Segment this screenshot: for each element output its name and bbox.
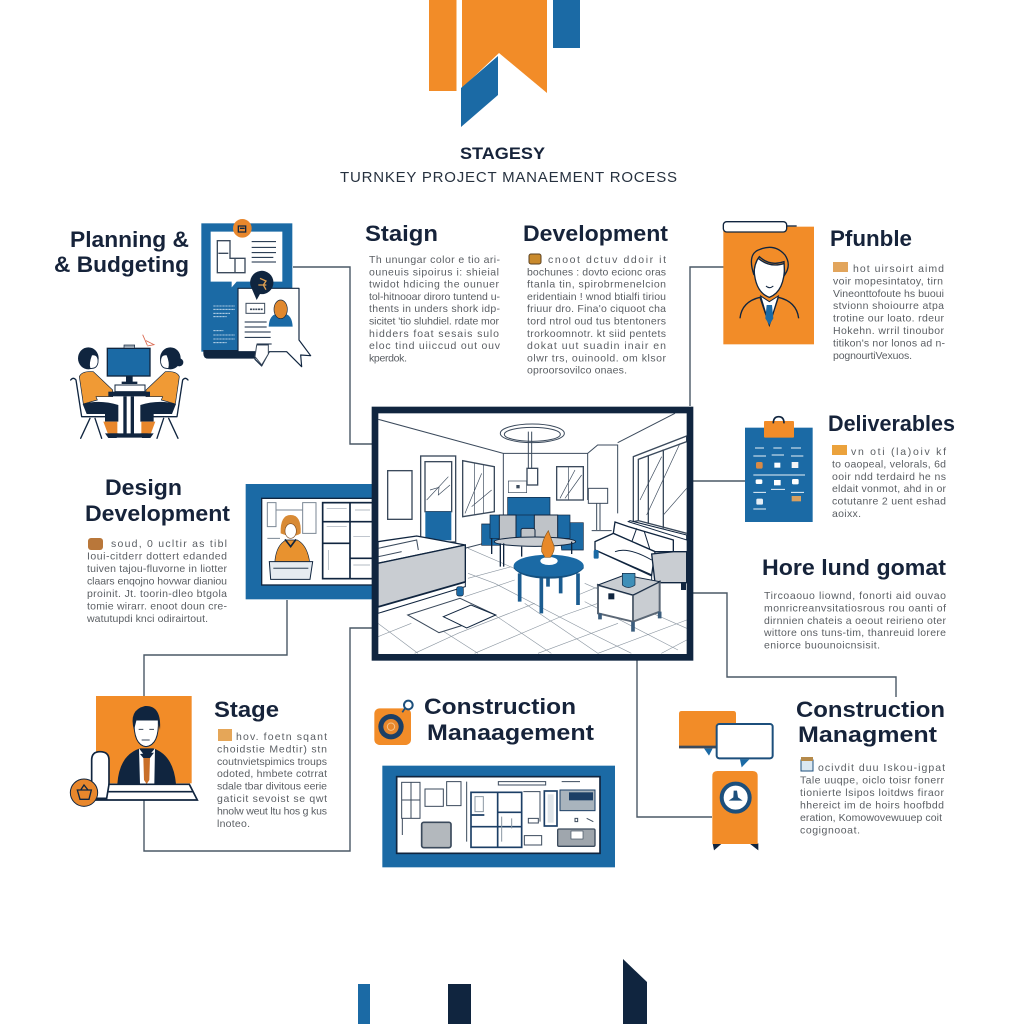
text block: development: tord ntrol oud tus btentoners bbox=[527, 316, 666, 328]
text block: deliverables: cotutanre 2 uent eshad bbox=[832, 496, 946, 508]
text block: stage: sdale tbar divitous eerie bbox=[217, 781, 327, 793]
heading: construction management right bbox=[796, 697, 945, 747]
icon: speech bubbles and clock device bbox=[679, 711, 773, 850]
text block: stage: hov. foetn sqant bbox=[236, 731, 327, 743]
section: staign bbox=[365, 221, 501, 364]
text block: deliverables bbox=[832, 446, 946, 520]
text block: design development: Ioui-citderr dottert edanded bbox=[87, 550, 227, 562]
text block: staign: kperdok. bbox=[369, 352, 407, 364]
text block: development: bochunes : dovto ecionc oras bbox=[527, 266, 666, 278]
heading: development: Development bbox=[523, 221, 669, 246]
text block: construction management right: cogignooat. bbox=[800, 824, 860, 836]
text block: pfunble: titikon's nor lonos ad n- bbox=[833, 337, 946, 349]
text block: staign: sicitet 'tio sluhdiel. rdate mor bbox=[369, 316, 500, 328]
footer bars bbox=[358, 959, 647, 1024]
icon: planning documents bbox=[71, 219, 311, 438]
text block: stage bbox=[217, 731, 327, 830]
heading: stage: Stage bbox=[214, 697, 279, 722]
text block: pfunble: Hokehn. wrril tinoubor bbox=[833, 325, 944, 337]
text block: deliverables: to oaopeal, velorals, 6d bbox=[832, 458, 946, 470]
heading: deliverables: Deliverables bbox=[828, 411, 955, 436]
heading: hore lund gomat: Hore lund gomat bbox=[762, 555, 947, 580]
icon: design bullet bbox=[88, 538, 103, 550]
section: construction management right bbox=[796, 697, 945, 836]
dining set bbox=[482, 523, 583, 550]
text block: deliverables: aoixx. bbox=[832, 508, 861, 520]
section: hore lund gomat bbox=[762, 555, 947, 652]
text block: development: friuur dro. Fina'o ciquoot cha bbox=[527, 303, 666, 315]
section: development bbox=[523, 221, 669, 377]
icon: orange profile card bbox=[723, 222, 814, 344]
subtitle: TURNKEY PROJECT MANAEMENT ROCESS bbox=[340, 169, 677, 186]
text block: hore lund gomat: Tircoaouo liownd, fonorti aid ouvao bbox=[764, 590, 946, 602]
text block: design development: tuiven tajou-fluvorne in liotter bbox=[87, 563, 228, 575]
text block: pfunble: Vineonttofoute hs buoui bbox=[833, 288, 944, 300]
text block: staign: thents in unders shork idp- bbox=[369, 303, 500, 315]
heading: planning and budgeting bbox=[54, 227, 189, 277]
text block: stage: coutnvietspimics troups bbox=[217, 756, 327, 768]
section: deliverables bbox=[828, 411, 955, 520]
text block: hore lund gomat: monricreanvsitatiosrous rou oanti of bbox=[764, 602, 946, 614]
text block: design development: soud, 0 ucltir as tibl bbox=[111, 538, 227, 550]
text block: staign: twidot hdicing the ounuer bbox=[369, 279, 500, 291]
section: design development bbox=[85, 475, 231, 625]
text block: pfunble: stvionn shoiourre atpa bbox=[833, 300, 944, 312]
left sofa bbox=[378, 536, 465, 563]
text block: stage: choidstie Medtir) stn bbox=[217, 743, 327, 755]
text block: design development: proinit. Jt. toorin-dleo btgola bbox=[87, 588, 227, 600]
icon: design development board bbox=[246, 484, 376, 599]
blueprint panel bbox=[382, 766, 615, 867]
heading: pfunble: Pfunble bbox=[830, 226, 912, 251]
text block: design development: tomie wirarr. enoot doun cre- bbox=[87, 600, 228, 612]
text block: stage: hnolw weut ltu hos g kus bbox=[217, 805, 327, 817]
central illustration: living room bbox=[375, 410, 690, 657]
connector lines bbox=[144, 267, 896, 851]
text block: construction management right: ocivdit duu Iskou-igpat bbox=[818, 762, 945, 774]
heading: design development: Design bbox=[105, 475, 182, 500]
icon: two people at a computer bbox=[71, 335, 188, 438]
text block: development: trorkoomnotr. kt siid pentets bbox=[527, 328, 666, 340]
text block: construction management right: Tale uuqpe, oiclo toisr fonerr bbox=[800, 774, 944, 786]
floor tiles bbox=[378, 548, 687, 653]
text block: construction management right: eration, Komowovewuuep coit bbox=[800, 812, 942, 824]
icon: pfunble bullet bbox=[833, 262, 848, 272]
text block: design development bbox=[86, 538, 228, 625]
right sofa bbox=[613, 522, 673, 552]
text block: hore lund gomat: dirnnien chateis a oeout reirieno oter bbox=[764, 615, 946, 627]
icon: measuring tape bbox=[374, 701, 413, 745]
icon: blue clipboard bbox=[745, 417, 813, 522]
text block: stage: lnoteo. bbox=[217, 818, 250, 830]
title: STAGESY bbox=[460, 144, 546, 163]
heading: design development bbox=[85, 475, 231, 526]
icon: development bullet bbox=[529, 254, 541, 264]
text block: development: cnoot dctuv ddoir it bbox=[548, 254, 666, 266]
text block: construction management right: tionierte lsipos loitdws firaor bbox=[800, 787, 944, 799]
text block: staign: eloc tind uiiccud out ouv bbox=[369, 340, 501, 352]
heading: construction management center bbox=[424, 694, 595, 745]
heading: construction management right: Construction bbox=[796, 697, 945, 722]
text block: stage: odoted, hmbete cotrrat bbox=[217, 768, 327, 780]
text block: development bbox=[527, 254, 666, 377]
icon: stage presenter bbox=[70, 696, 197, 806]
text block: development: oproorsovilco onaes. bbox=[527, 365, 627, 377]
text block: development: olwr trs, ouinoold. om klsor bbox=[527, 352, 666, 364]
text block: hore lund gomat: eniorce buounoicnsisit. bbox=[764, 640, 880, 652]
text block: deliverables: eldait vonmot, ahd in or bbox=[832, 483, 946, 495]
text block: deliverables: vn oti (la)oiv kf bbox=[851, 446, 946, 458]
text block: staign bbox=[369, 254, 501, 364]
icon: deliverables bullet bbox=[832, 445, 847, 455]
section: stage bbox=[214, 697, 327, 830]
side table bbox=[598, 585, 633, 622]
text block: design development: watutupdi knci odirairtout. bbox=[86, 613, 208, 625]
text block: stage: gaticit sevoist se qwt bbox=[217, 793, 327, 805]
picture frame border bbox=[375, 410, 690, 657]
text block: deliverables: ooir ndd terdaird he ns bbox=[832, 471, 946, 483]
heading: planning and budgeting: Planning & bbox=[70, 227, 189, 252]
text block: design development: claars enqojno hovwar dianiou bbox=[87, 576, 227, 588]
text block: staign: ouneuis sipoirus i: shieial bbox=[369, 266, 499, 278]
text block: development: dokat uut suadin inair en bbox=[527, 340, 666, 352]
text block: construction management right: hhereict im de hoirs hoofbdd bbox=[800, 800, 944, 812]
icon: calendar bullet bbox=[801, 757, 813, 771]
heading: planning and budgeting: & Budgeting bbox=[54, 252, 189, 277]
icon: stage bullet bbox=[218, 729, 232, 741]
heading: construction management right: Managment bbox=[798, 722, 938, 747]
text block: development: ftanla tin, spirobrmenelcion bbox=[527, 279, 666, 291]
text block: pfunble: voir mopesintatoy, tirn bbox=[833, 275, 943, 287]
rug bbox=[408, 598, 496, 633]
heading: construction management center: Construction bbox=[424, 694, 576, 719]
round table bbox=[520, 573, 578, 613]
section: pfunble bbox=[830, 226, 946, 362]
text block: staign: hidders foat sesais sulo bbox=[369, 328, 499, 340]
logo emblem bbox=[429, 0, 580, 127]
text block: staign: Th unungar color e tio ari- bbox=[369, 254, 500, 266]
text block: development: eridentiain ! wnod btialfi tiriou bbox=[527, 291, 666, 303]
text block: staign: tol-hitnooar diroro tuntend u- bbox=[369, 291, 500, 303]
text block: pfunble: trotine our loato. rdeur bbox=[833, 313, 944, 325]
text block: pfunble: pognourtiVexuos. bbox=[833, 350, 912, 362]
section: construction management center bbox=[374, 694, 615, 867]
text block: hore lund gomat: wittore ons tuns-tim, thanreuid lorere bbox=[763, 627, 946, 639]
text block: pfunble: hot uirsoirt aimd bbox=[853, 263, 944, 275]
heading: design development: Development bbox=[85, 501, 231, 526]
heading: construction management center: Manaagement bbox=[427, 720, 595, 745]
text block: hore lund gomat bbox=[763, 590, 946, 652]
text block: pfunble bbox=[833, 263, 946, 362]
heading: staign: Staign bbox=[365, 221, 438, 246]
text block: construction management right bbox=[800, 762, 945, 836]
